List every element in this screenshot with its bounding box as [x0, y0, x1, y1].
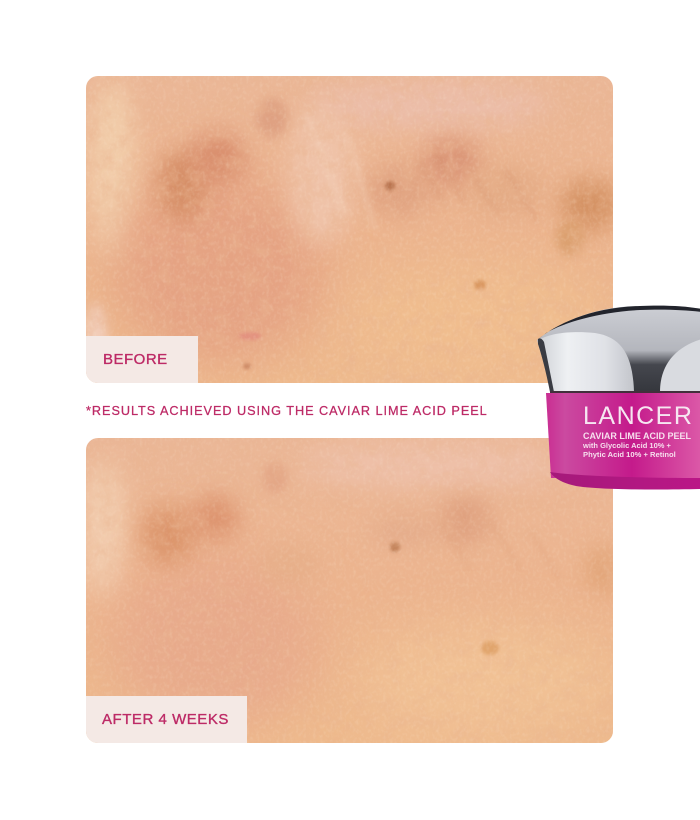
brand name: LANCER	[583, 402, 693, 430]
disclaimer text: *RESULTS ACHIEVED USING THE CAVIAR LIME ACID PEEL	[86, 404, 488, 418]
jar cap	[537, 306, 700, 395]
jar base	[550, 472, 700, 490]
product description: Phytic Acid 10% + Retinol	[583, 450, 676, 459]
label: before: BEFORE	[103, 351, 168, 368]
label: after 4 weeks	[86, 696, 247, 743]
skin creases	[418, 152, 538, 222]
product description	[582, 431, 692, 459]
label: after 4 weeks: AFTER 4 WEEKS	[102, 711, 229, 728]
label: before	[86, 336, 198, 383]
product description: with Glycolic Acid 10% +	[582, 441, 671, 450]
jar band	[546, 393, 700, 478]
skin creases	[440, 520, 560, 580]
left lobe	[539, 332, 634, 392]
product: Lancer jar	[537, 306, 700, 490]
product description: CAVIAR LIME ACID PEEL	[583, 431, 692, 441]
panel: before photo	[84, 76, 620, 387]
right lobe	[660, 339, 700, 392]
panel: after photo	[82, 438, 620, 743]
